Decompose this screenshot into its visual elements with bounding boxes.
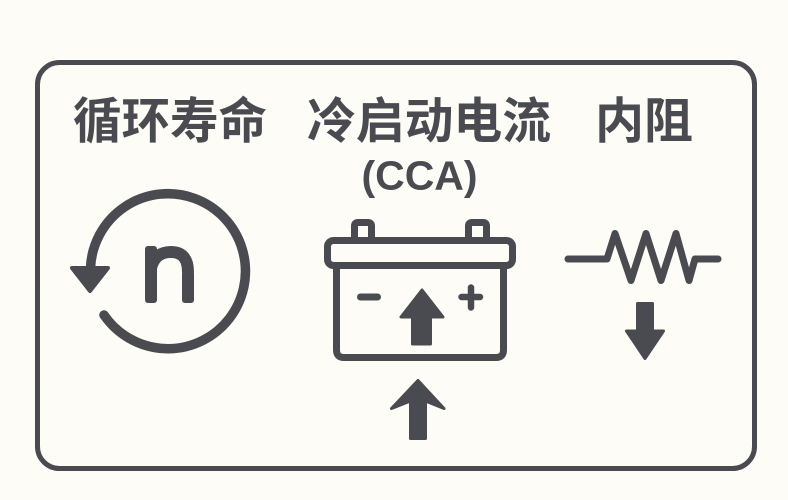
minus sign [360, 294, 378, 300]
heading: cycle life: 循环寿命 [73, 95, 267, 149]
cycle arrow head [72, 268, 108, 291]
icon: cycle with n [72, 194, 245, 349]
icon: resistor symbol [568, 234, 718, 280]
battery body [336, 266, 504, 358]
inner up arrow [401, 290, 443, 344]
cycle arrow ring [90, 194, 245, 349]
battery terminals [354, 222, 486, 240]
heading: cold cranking amps: (CCA) [362, 152, 478, 198]
letter n [145, 246, 194, 303]
icon: battery [328, 222, 512, 358]
heading: cold cranking amps: 冷启动电流 [307, 95, 551, 149]
battery lid [328, 240, 512, 266]
icon: up arrow below battery [392, 380, 444, 438]
heading: internal resistance: 内阻 [595, 95, 693, 149]
icon: down arrow [626, 304, 664, 358]
heading: cold cranking amps [307, 95, 551, 198]
plus sign [462, 288, 480, 308]
panel: rounded frame [38, 62, 754, 468]
